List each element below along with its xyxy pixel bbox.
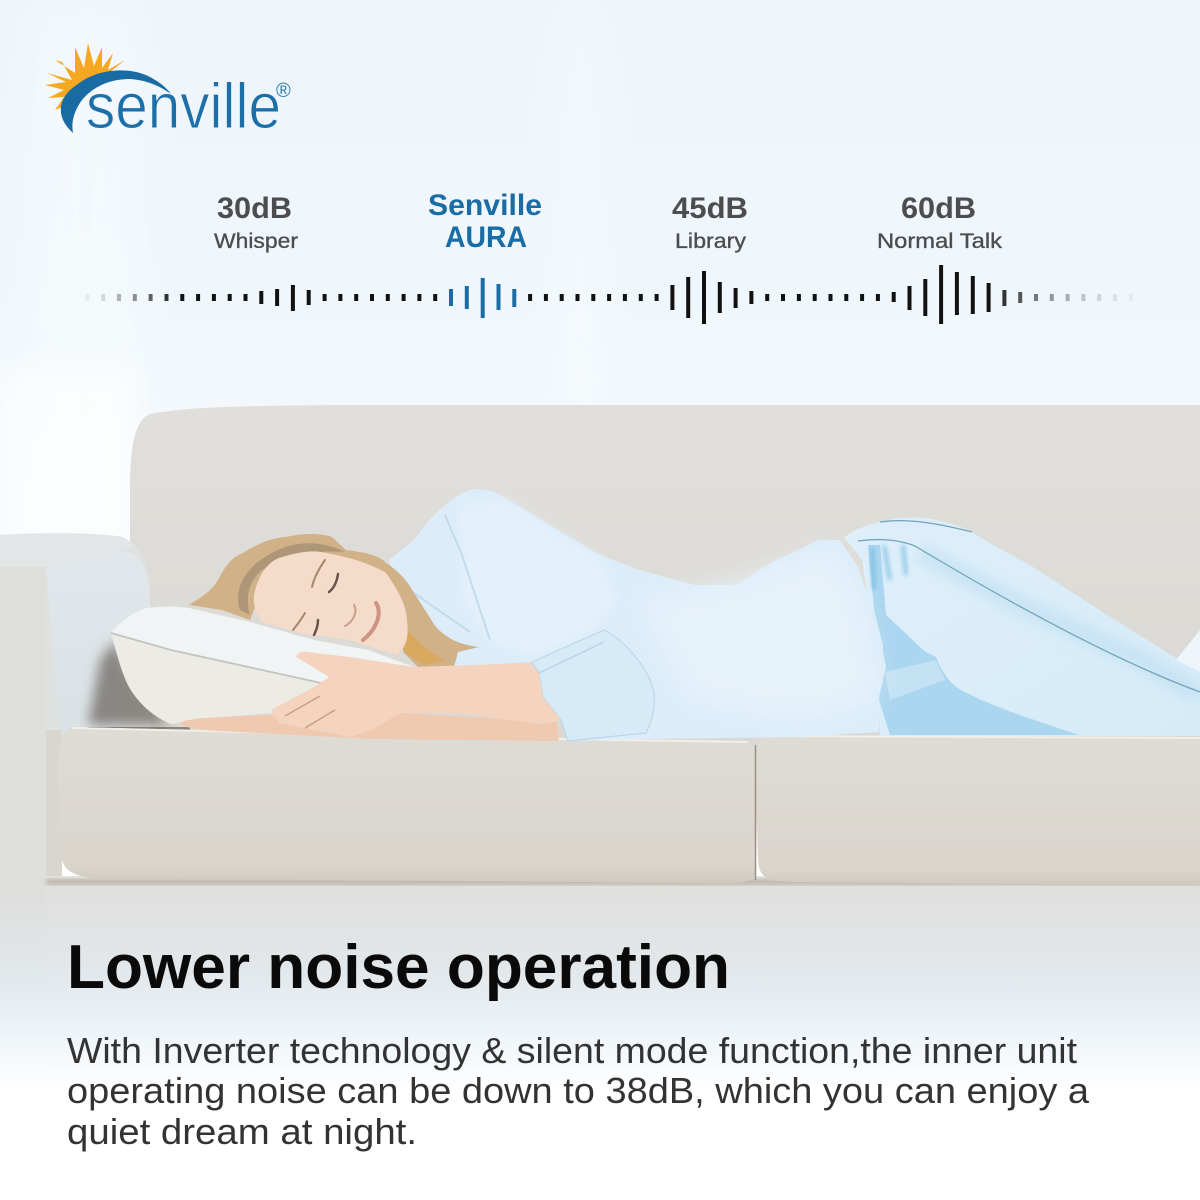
logo: Senville [45,43,291,142]
label: 45dB Library: 45dB [672,192,748,225]
wordmark: senville [86,70,281,142]
label: 45dB Library: Library [675,230,747,253]
armrest inner face [46,551,150,890]
shirt sleeve cuff [532,630,654,741]
sofa lower front [46,876,1200,1096]
face [254,551,408,655]
left seat cushion [58,727,757,883]
white base [0,1088,1200,1200]
label: Senville AURA: AURA [445,221,527,254]
body text [67,1030,1090,1152]
armrest front [0,567,46,1096]
label: 30dB Whisper: 30dB [217,192,292,225]
hair [189,534,479,667]
jeans pocket hem [885,660,945,700]
bottom fade to white [0,885,1200,1090]
icon: blue swoosh [61,70,171,133]
photo: woman sleeping [111,489,1200,741]
jeans shaded denim [879,645,1079,735]
label: 60dB Normal Talk [877,192,1003,253]
upper arm and hand [271,652,561,737]
icon: sun rays [45,43,125,110]
sound wave scale [87,265,1131,324]
right side pillow [1176,630,1200,672]
body text: quiet dream at night. [67,1111,417,1152]
heading: Lower noise operation [67,933,730,1002]
body text: With Inverter technology & silent mode function,the inner unit [67,1030,1077,1071]
label: 30dB Whisper: Whisper [214,230,298,253]
label: 60dB Normal Talk: Normal Talk [877,230,1003,253]
Senville AURA highlighted bars [451,278,514,318]
registered mark: ® [276,80,291,102]
label: Senville AURA: Senville [428,189,542,222]
label: Senville AURA [428,189,542,254]
body text: operating noise can be down to 38dB, which you can enjoy a [67,1070,1090,1111]
pillow [111,606,414,724]
shirt [389,489,886,741]
lower arm [179,713,559,741]
jeans [844,518,1200,736]
sofa back [130,405,1200,760]
label: 60dB Normal Talk: 60dB [901,192,976,225]
eyes, brows, nose and mouth [293,560,379,640]
jeans seam [858,521,1200,692]
right seat cushion [755,735,1200,885]
label: 30dB Whisper [214,192,298,253]
label: 45dB Library [672,192,748,253]
photo: sofa [0,405,1200,1096]
sofa armrest [0,533,150,760]
